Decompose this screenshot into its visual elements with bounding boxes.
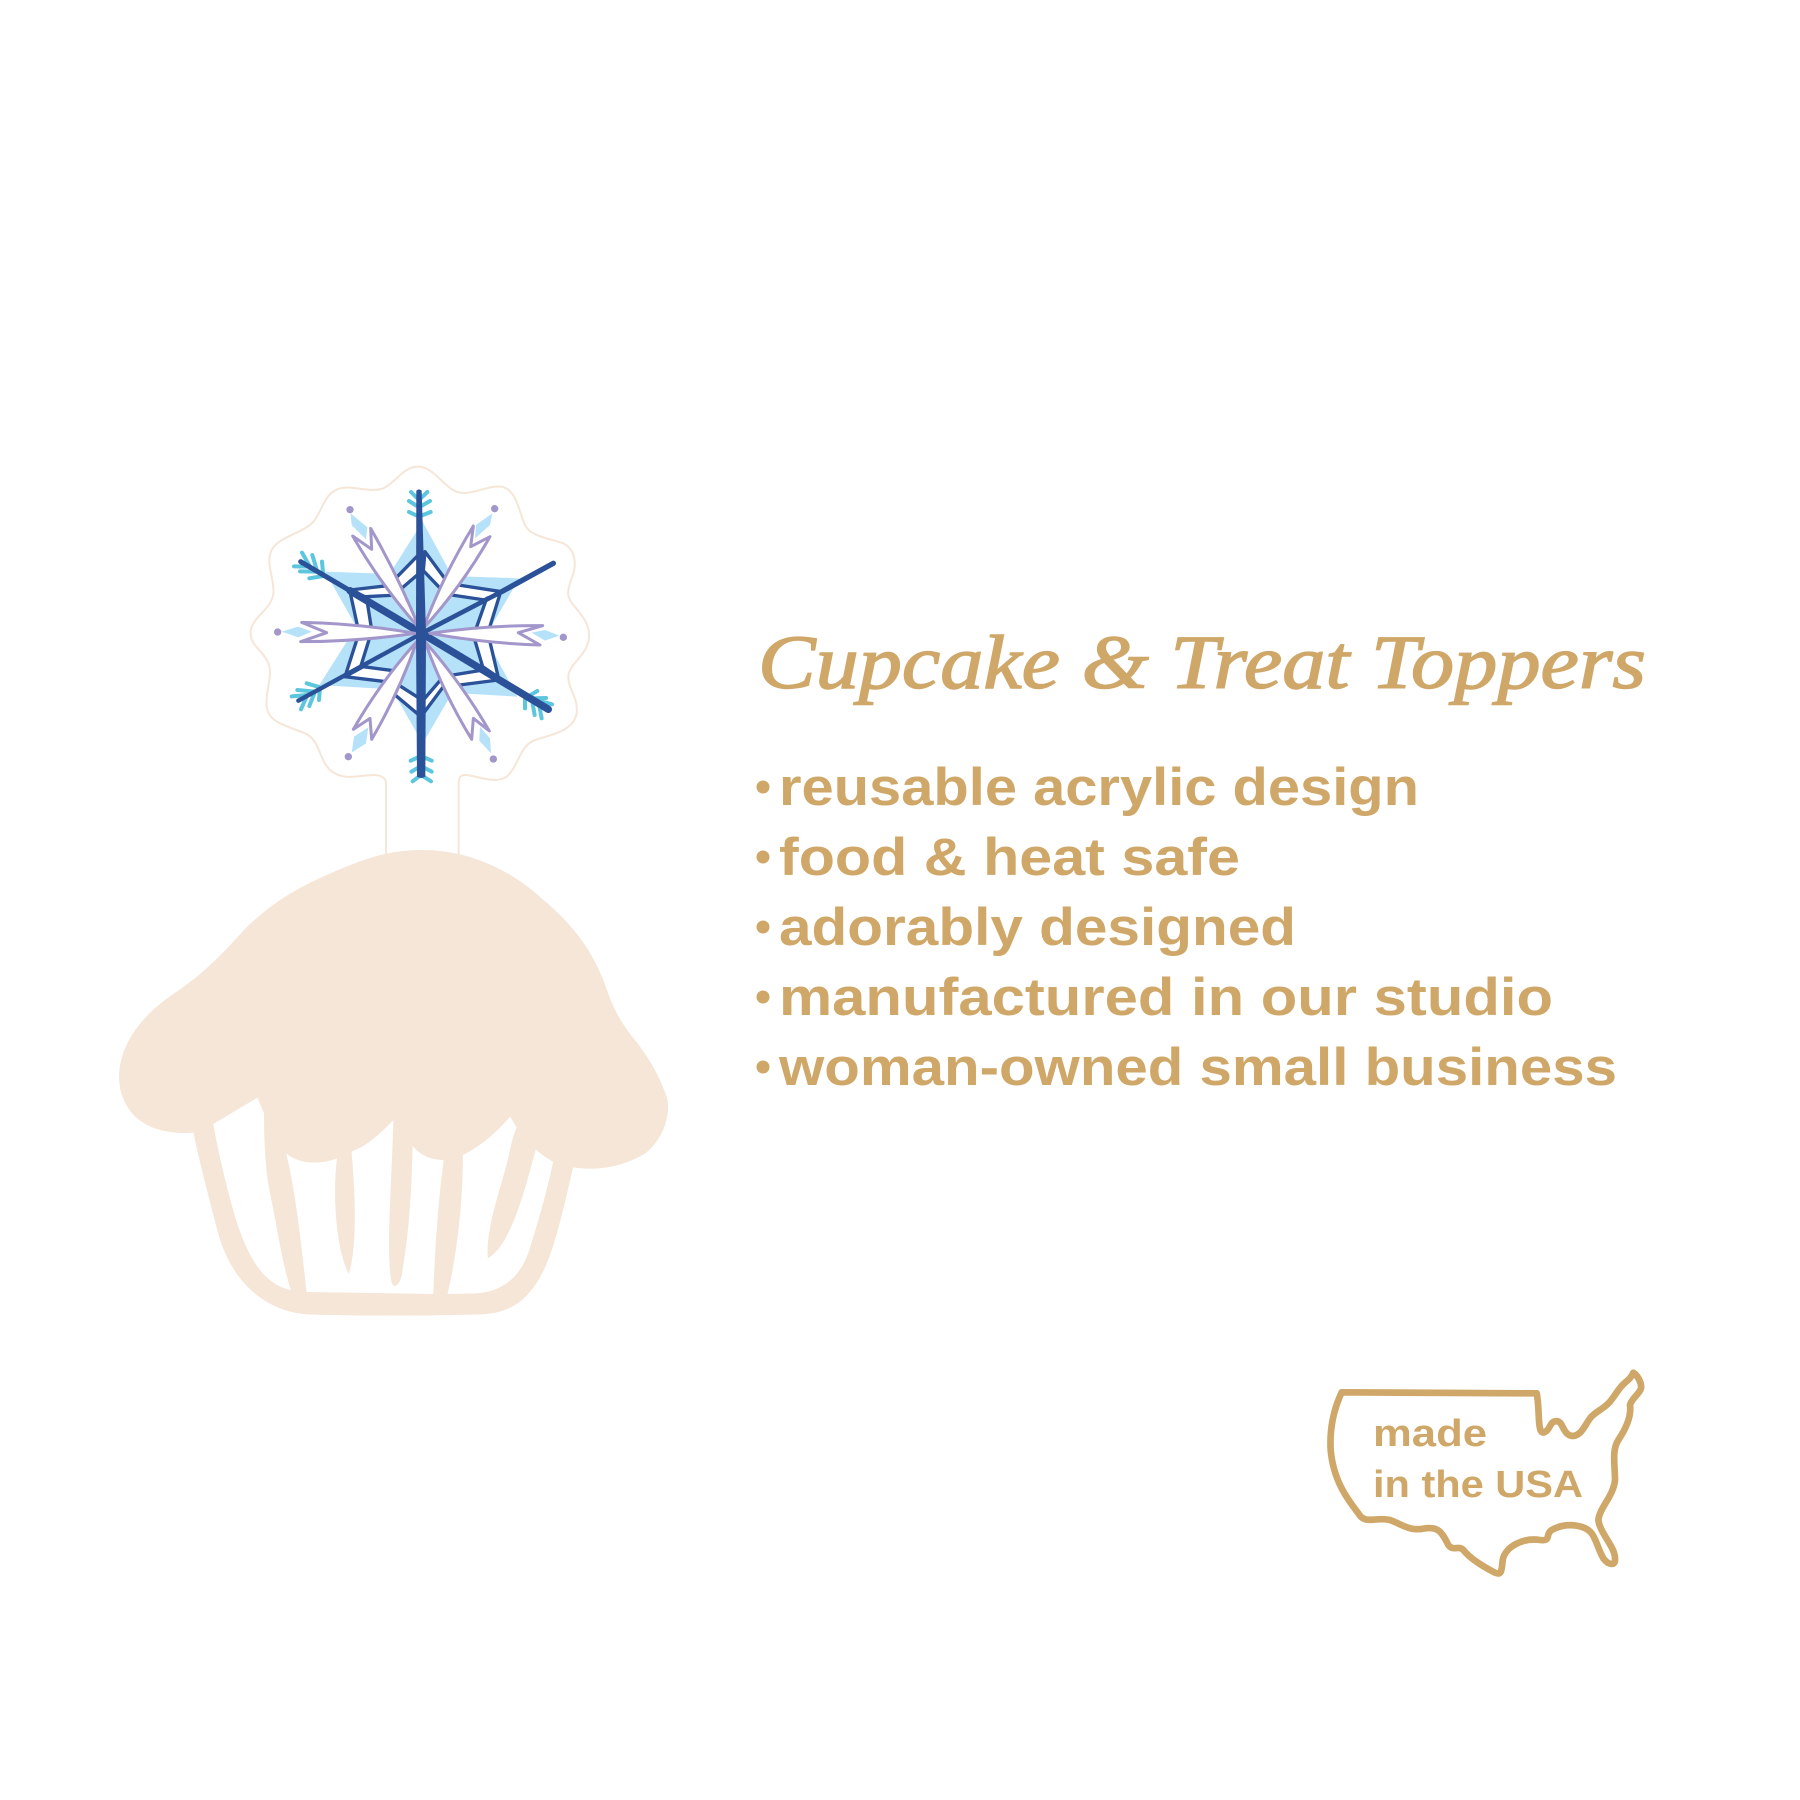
teal feather tips [292, 492, 552, 781]
bullet: adorably designed: adorably designed [779, 898, 1296, 957]
purple dots and pale blue kites [274, 505, 567, 763]
feature list [756, 758, 1617, 1097]
central vertical spoke [416, 489, 426, 778]
badge text [1373, 1413, 1583, 1506]
purple notched petals [301, 526, 543, 739]
bullet: food and heat safe: food & heat safe [779, 828, 1240, 887]
badge text: in the USA [1373, 1464, 1583, 1506]
bullet: manufactured in our studio: manufactured in our studio [779, 968, 1553, 1027]
light blue hexagram [319, 522, 519, 743]
dark blue spokes [298, 562, 553, 709]
badge: made in the USA [1330, 1373, 1641, 1574]
double-line ribbon hexagon [345, 552, 502, 717]
badge text: made [1373, 1413, 1487, 1455]
bullet: woman-owned small business: woman-owned small business [778, 1038, 1617, 1097]
icon: USA map outline [1330, 1373, 1641, 1574]
icon: cupcake silhouette [119, 850, 668, 1316]
illustration: cupcake with snowflake topper [119, 467, 668, 1316]
bullet: reusable acrylic design: reusable acrylic design [779, 758, 1419, 817]
icon: snowflake [274, 489, 567, 781]
topper outline with stick [251, 467, 589, 855]
title: Cupcake & Treat Toppers [758, 621, 1646, 705]
